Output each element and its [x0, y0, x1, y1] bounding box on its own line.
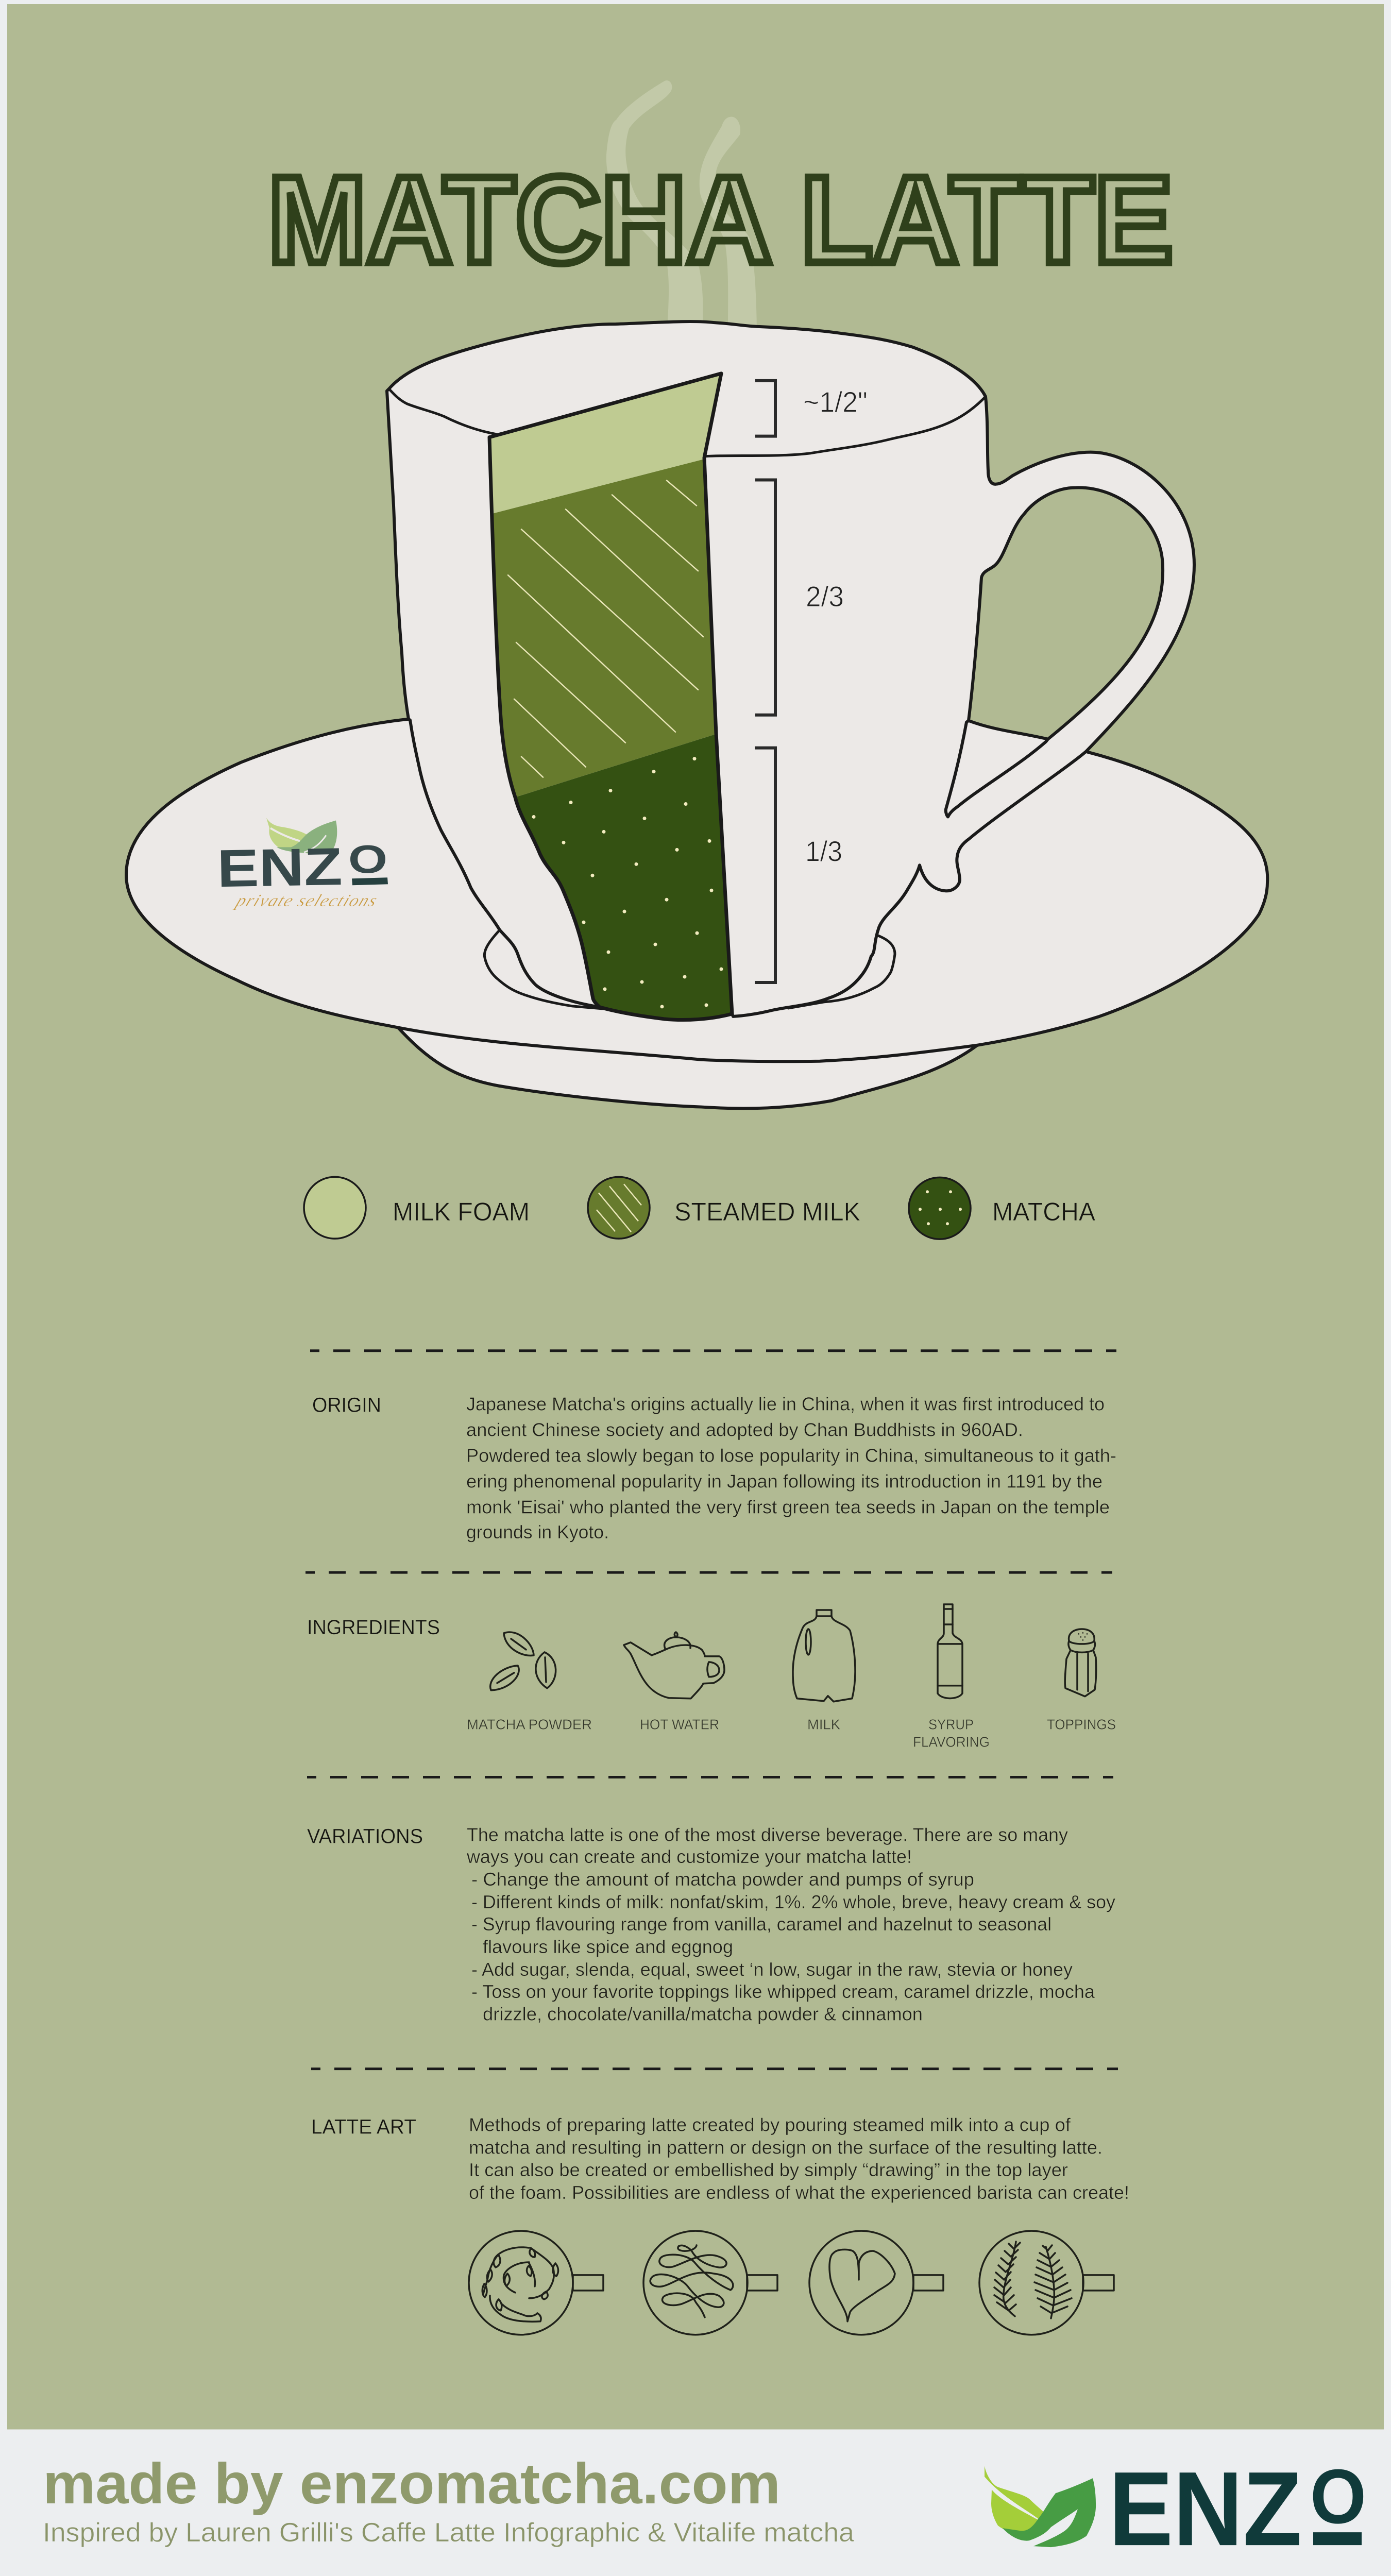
title: MATCHA LATTE: [268, 150, 1173, 289]
footer logo: Enzo: [985, 2450, 1366, 2568]
text block: variations: drizzle, chocolate/vanilla/matcha powder & cinnamon: [483, 2004, 923, 2025]
layer: milk foam: [489, 374, 721, 514]
icon: cup with swirl knot: [643, 2231, 777, 2335]
layer: steamed milk: [491, 460, 716, 798]
heading: origin: ORIGIN: [312, 1394, 381, 1417]
bracket: two thirds: [755, 480, 775, 715]
text block: origin: monk 'Eisai' who planted the very first green tea seeds in Japan on the temple: [466, 1496, 1110, 1517]
heading: ingredients: INGREDIENTS: [307, 1616, 440, 1639]
saucer base: [398, 1019, 977, 1108]
cutaway outline: [489, 374, 732, 1020]
text block: origin: [466, 1394, 1116, 1543]
wordmark O: O: [348, 837, 387, 882]
icon: syrup bottle: [938, 1604, 962, 1698]
icon: topping shaker: [1065, 1629, 1096, 1697]
label: half inch: ~1/2": [803, 386, 868, 418]
text block: latte art: It can also be created or embellished by simply “drawing” in the top layer: [469, 2159, 1068, 2180]
pattern: steamed milk hatching: [508, 481, 703, 777]
tagline: private selections: [232, 891, 380, 910]
label: hot water: HOT WATER: [640, 1717, 719, 1733]
footer subheading: Inspired by Lauren Grilli's Caffe Latte Infographic & Vitalife matcha: [43, 2518, 854, 2548]
bracket: half inch: [755, 381, 775, 436]
text block: variations: - Syrup flavouring range from vanilla, caramel and hazelnut to seasonal: [471, 1913, 1051, 1935]
text block: variations: flavours like spice and eggnog: [483, 1936, 733, 1957]
icon: milk jug: [793, 1610, 855, 1702]
label: syrup flavoring: [913, 1717, 990, 1750]
icon: cup with heart: [809, 2231, 943, 2335]
text block: origin: Powdered tea slowly began to lose popularity in China, simultaneous to it gath-: [466, 1445, 1116, 1466]
text block: latte art: matcha and resulting in pattern or design on the surface of the resulting latte.: [469, 2137, 1102, 2158]
icon: rising steam: [606, 80, 757, 329]
cup rim front edge: [389, 389, 986, 456]
cup body and handle: [387, 321, 1194, 1020]
text block: latte art: of the foam. Possibilities are endless of what the experienced barista can create!: [469, 2182, 1129, 2203]
heading: variations: VARIATIONS: [307, 1825, 423, 1848]
footer heading: made by enzomatcha.com: [43, 2451, 781, 2516]
saucer inner ring: [484, 930, 895, 1009]
section: latte art: [311, 2114, 1129, 2335]
legend: milk foam: [304, 1177, 530, 1239]
text block: origin: grounds in Kyoto.: [466, 1521, 609, 1543]
label: syrup flavoring: SYRUP: [928, 1717, 974, 1733]
legend: steamed milk: STEAMED MILK: [674, 1197, 860, 1226]
legend: matcha: MATCHA: [992, 1197, 1096, 1226]
illustration: latte cup and saucer: [126, 321, 1267, 1108]
legend: [304, 1177, 1096, 1239]
label: one third: 1/3: [805, 835, 842, 867]
text block: origin: ancient Chinese society and adopted by Chan Buddhists in 960AD.: [466, 1419, 1023, 1440]
text block: variations: - Toss on your favorite toppings like whipped cream, caramel drizzle, mocha: [471, 1981, 1095, 2002]
saucer: [126, 719, 1267, 1061]
icon: logo leaves: [985, 2466, 1096, 2547]
heading: latte art: LATTE ART: [311, 2115, 416, 2138]
legend: milk foam: MILK FOAM: [393, 1197, 530, 1226]
text block: variations: - Add sugar, slenda, equal, sweet ‘n low, sugar in the raw, stevia or honey: [471, 1959, 1073, 1980]
wordmark: ENZ: [1109, 2450, 1302, 2568]
section: ingredients: [307, 1604, 1116, 1750]
text block: variations: - Change the amount of matcha powder and pumps of syrup: [471, 1869, 974, 1890]
pattern: matcha dots: [532, 757, 723, 1008]
text block: latte art: Methods of preparing latte created by pouring steamed milk into a cup of: [469, 2114, 1071, 2135]
section: variations: [307, 1824, 1115, 2025]
icon: cup with rosetta ring: [469, 2231, 603, 2335]
wordmark O: O: [1310, 2453, 1366, 2539]
icon: teapot: [624, 1632, 724, 1699]
icon: matcha leaves: [490, 1632, 556, 1690]
wordmark: ENZ: [216, 837, 343, 898]
wordmark underline: [1313, 2532, 1362, 2545]
footer: credit: [43, 2451, 854, 2548]
text block: latte art: [469, 2114, 1129, 2203]
section: origin: [312, 1394, 1116, 1543]
label: syrup flavoring: FLAVORING: [913, 1734, 990, 1750]
layer: matcha: [515, 734, 732, 1020]
icon: cup with ferns: [979, 2231, 1114, 2335]
text block: variations: The matcha latte is one of the most diverse beverage. There are so many: [467, 1824, 1068, 1845]
label: matcha powder: MATCHA POWDER: [467, 1717, 592, 1733]
logo: Enzo private selections: [216, 818, 388, 910]
text block: origin: Japanese Matcha's origins actually lie in China, when it was first introduced to: [466, 1394, 1105, 1415]
text block: variations: - Different kinds of milk: nonfat/skim, 1%. 2% whole, breve, heavy cream & soy: [471, 1891, 1115, 1912]
icon: leaves: [266, 818, 337, 854]
text block: variations: [466, 1824, 1115, 2025]
label: toppings: TOPPINGS: [1047, 1717, 1116, 1733]
legend: matcha: [909, 1177, 1096, 1239]
text block: variations: ways you can create and customize your matcha latte!: [466, 1846, 912, 1867]
label: milk: MILK: [807, 1717, 840, 1733]
wordmark underline: [352, 877, 388, 885]
label: two thirds: 2/3: [806, 580, 844, 613]
bracket: one third: [755, 748, 775, 982]
text block: origin: ering phenomenal popularity in Japan following its introduction in 1191 by the: [466, 1470, 1102, 1492]
legend: steamed milk: [588, 1177, 860, 1239]
